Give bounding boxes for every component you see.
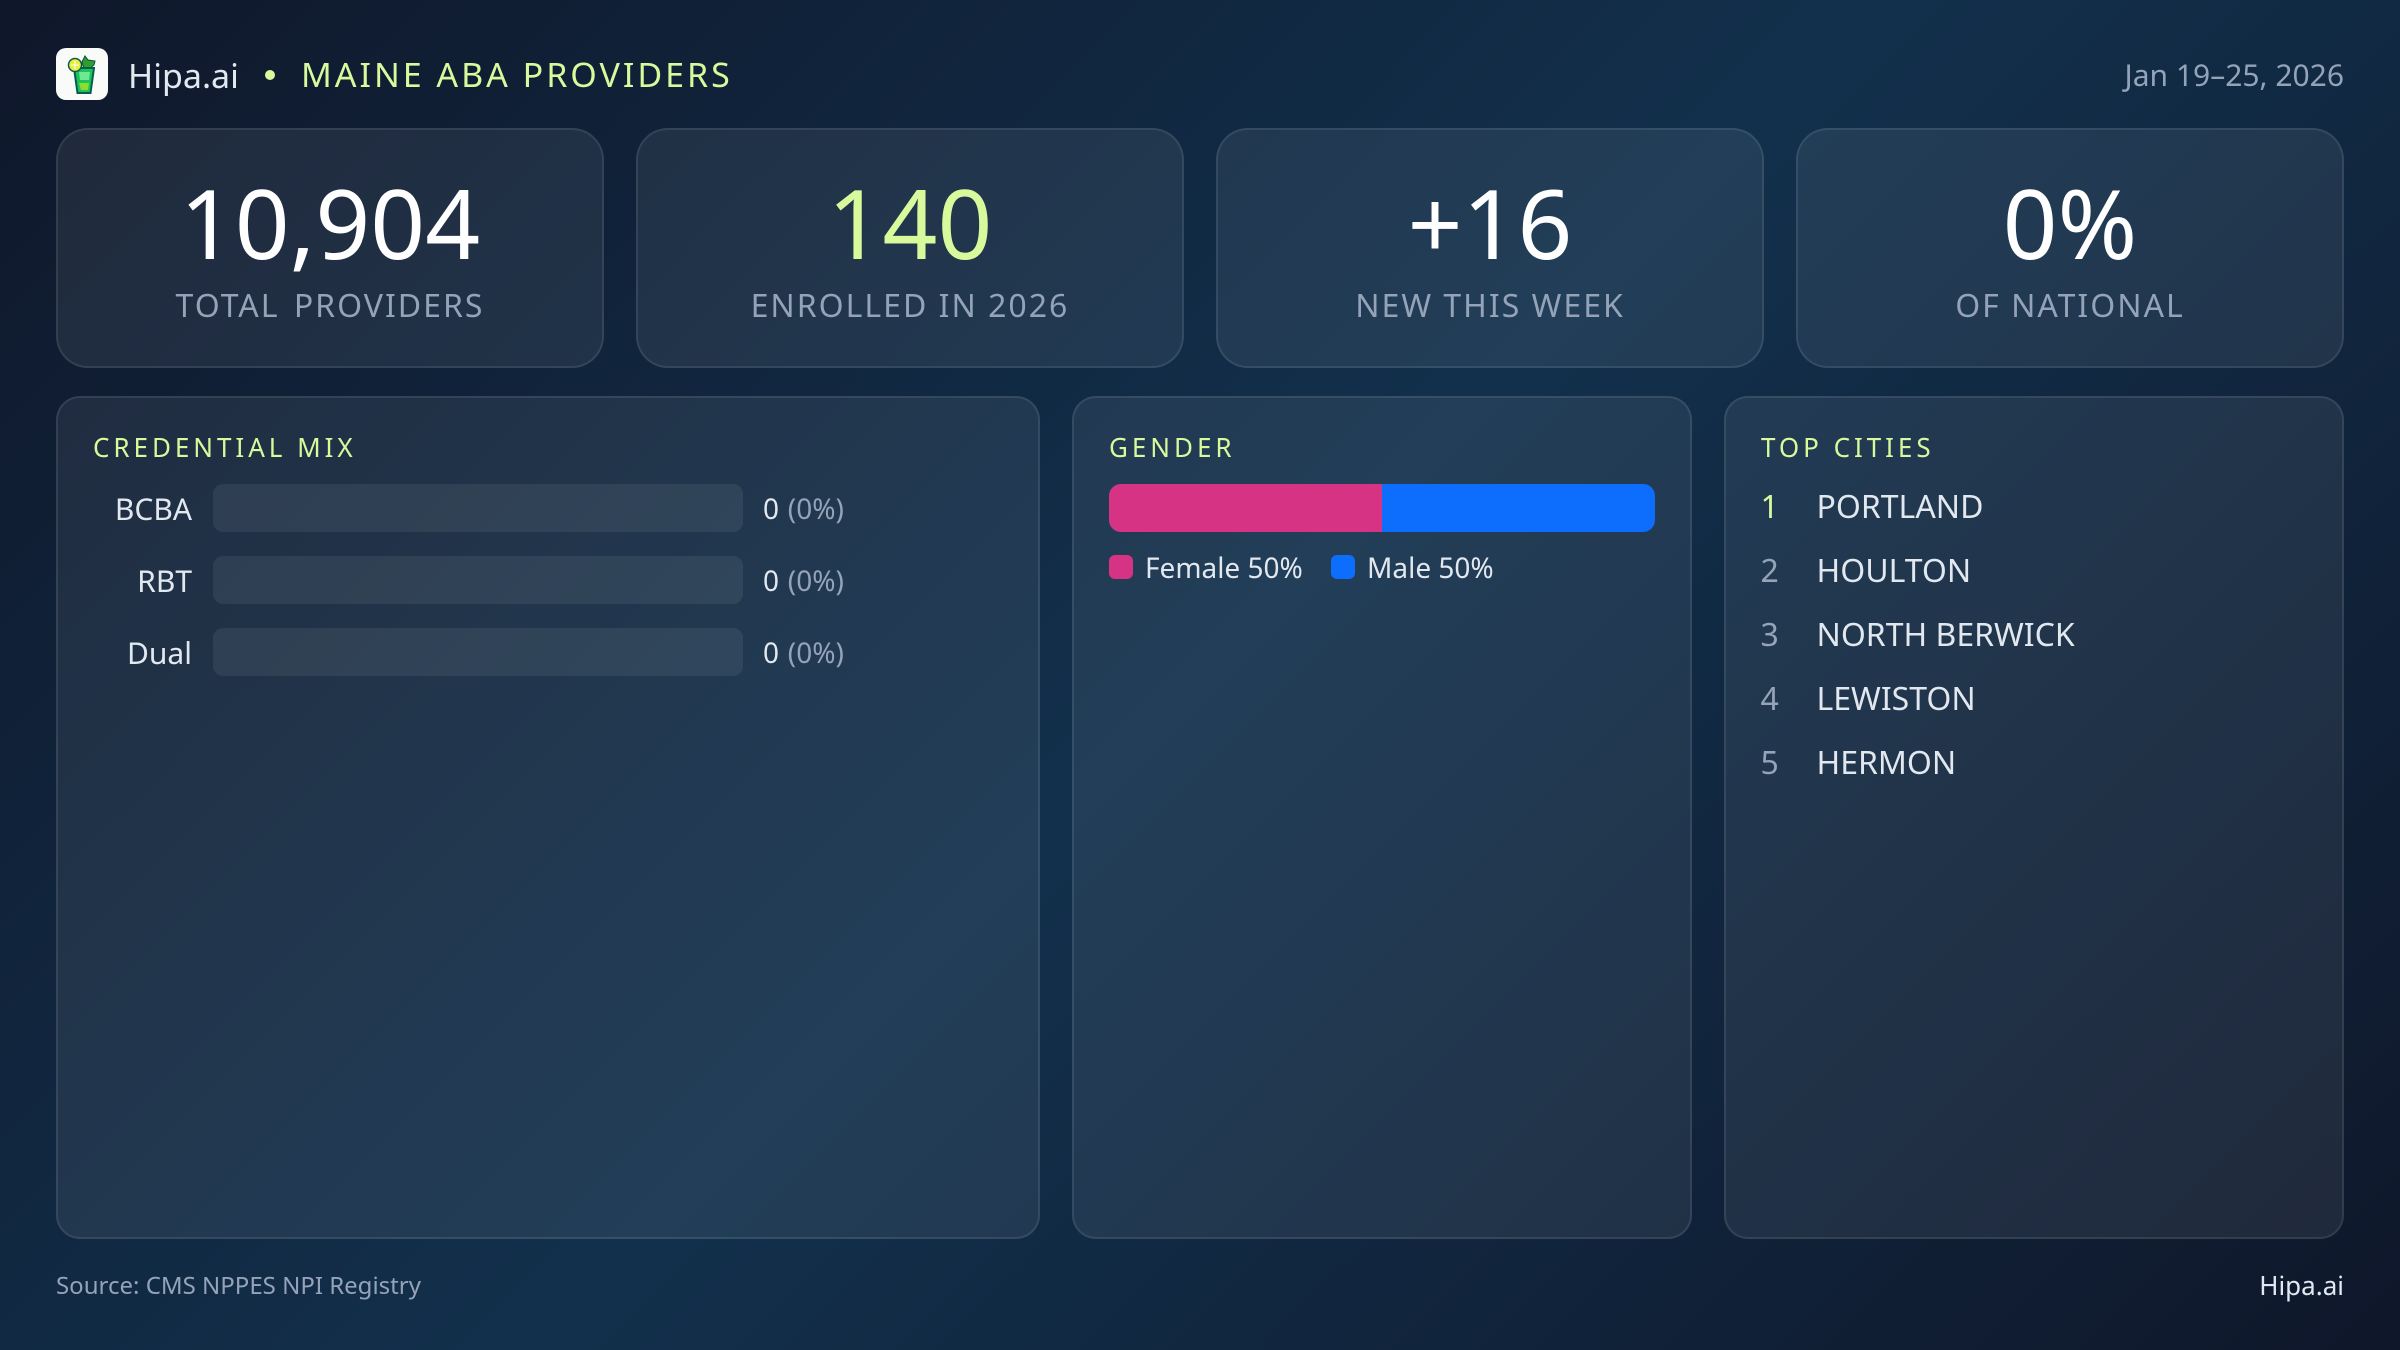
stat card: of national: [1796, 128, 2344, 368]
heading: MAINE ABA PROVIDERS: [301, 51, 733, 97]
panel: top cities: TOP CITIES: [1761, 429, 1935, 465]
stat card: new this week: NEW THIS WEEK: [1355, 284, 1625, 326]
panel: credential mix: Dual: [127, 632, 192, 673]
panel: top cities: 2: [1760, 549, 1779, 592]
panel: top cities: HERMON: [1816, 741, 1956, 784]
panel: gender: Female 50%: [1145, 549, 1303, 587]
panel: credential mix: 0 (0%): [763, 562, 844, 600]
panel: top cities: 1: [1760, 485, 1779, 528]
stat card: of national: OF NATIONAL: [1955, 284, 2185, 326]
panel: top cities: [1724, 396, 2344, 1239]
panel: gender: Male 50%: [1367, 549, 1494, 587]
source note: Source: CMS NPPES NPI Registry: [56, 1269, 421, 1302]
panel: credential mix: 0 (0%): [763, 634, 844, 672]
panel: top cities: LEWISTON: [1816, 677, 1976, 720]
panel: credential mix: RBT: [137, 560, 192, 601]
panel: top cities: NORTH BERWICK: [1816, 613, 2075, 656]
panel: gender: GENDER: [1109, 429, 1236, 465]
stat card: new this week: [1216, 128, 1764, 368]
panel: top cities: 3: [1760, 613, 1779, 656]
footer brand: Hipa.ai: [2259, 1266, 2344, 1302]
bullet separator: [265, 70, 275, 80]
stat card: total providers: 10,904: [180, 156, 480, 288]
panel: credential mix: BCBA: [115, 488, 192, 529]
panel: top cities: 4: [1760, 677, 1779, 720]
stat card: total providers: TOTAL PROVIDERS: [176, 284, 484, 326]
brand name: Hipa.ai: [128, 52, 239, 98]
date range: Jan 19–25, 2026: [2125, 54, 2344, 95]
stat card: enrolled in 2026: ENROLLED IN 2026: [751, 284, 1069, 326]
stat card: enrolled in 2026: 140: [828, 156, 992, 288]
panel: top cities: PORTLAND: [1816, 485, 1983, 528]
stat card: total providers: [56, 128, 604, 368]
panel: gender: [1072, 396, 1692, 1239]
panel: credential mix: [56, 396, 1040, 1239]
panel: top cities: 5: [1760, 741, 1779, 784]
logo: cocktail icon: [56, 48, 108, 100]
panel: top cities: HOULTON: [1816, 549, 1971, 592]
stat card: of national: 0%: [2003, 156, 2137, 288]
stat card: new this week: +16: [1408, 156, 1572, 288]
panel: credential mix: CREDENTIAL MIX: [93, 429, 357, 465]
panel: credential mix: 0 (0%): [763, 490, 844, 528]
stat card: enrolled in 2026: [636, 128, 1184, 368]
